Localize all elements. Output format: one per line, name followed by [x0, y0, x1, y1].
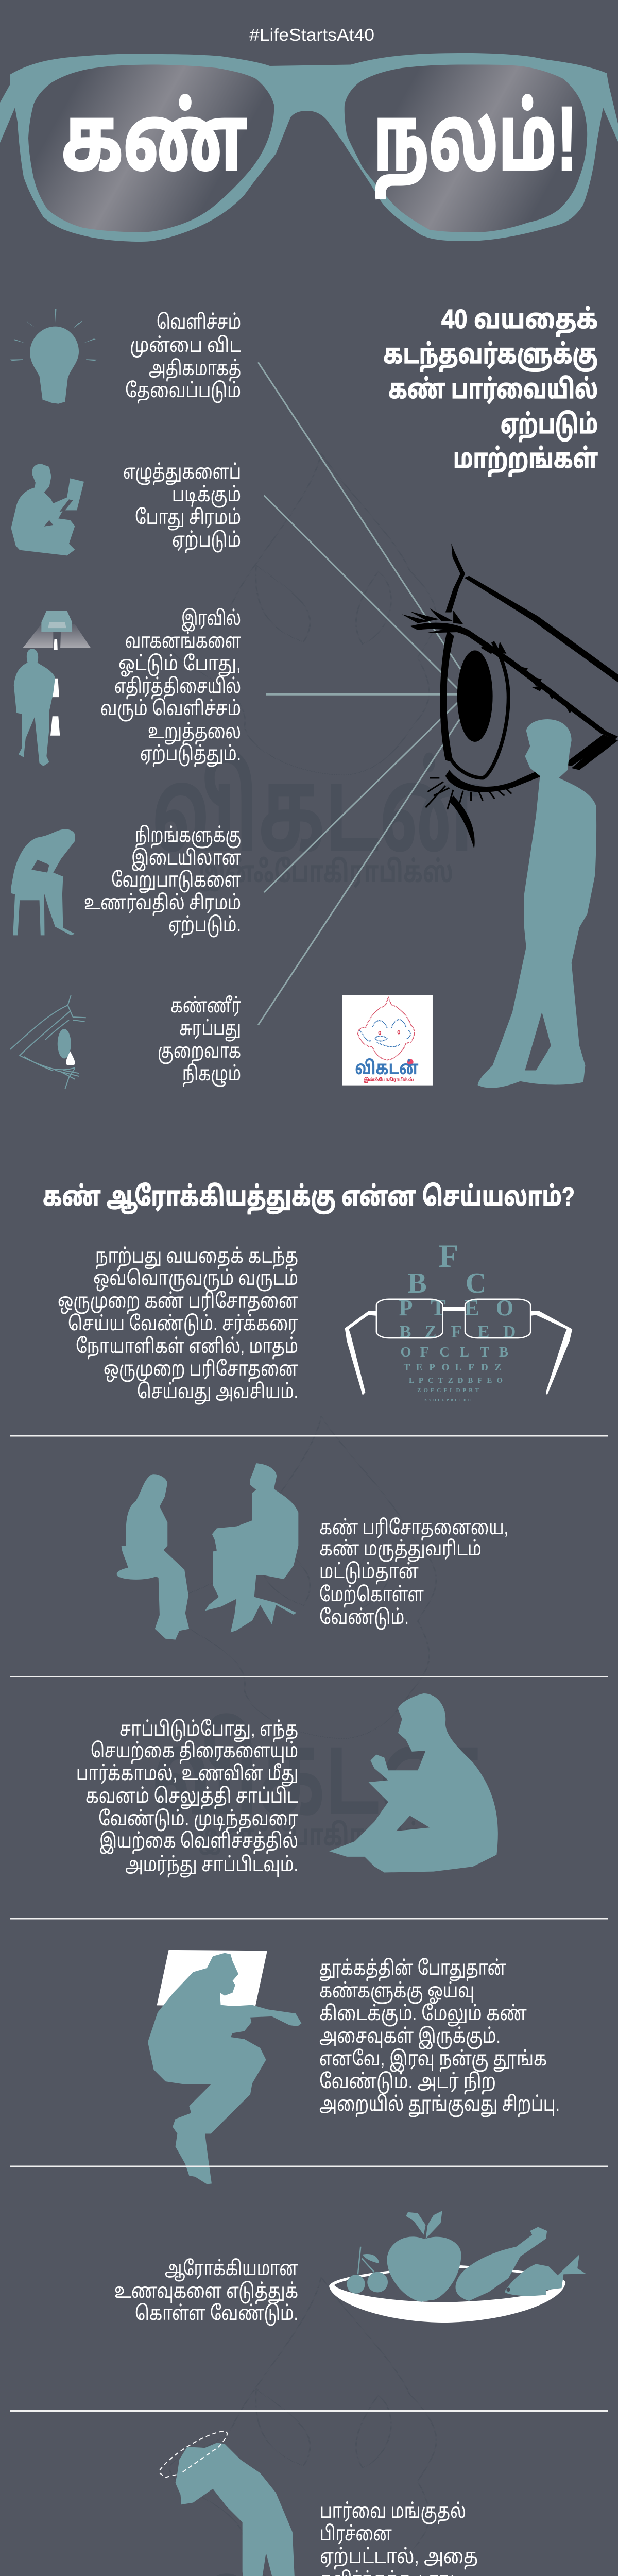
hashtag: #LifeStartsAt40	[249, 25, 374, 44]
eye chart: L	[455, 1362, 461, 1373]
text: light need: வெளிச்சம்	[157, 311, 241, 333]
text: colour difficulty: நிறங்களுக்கு	[135, 824, 241, 849]
watermark 3	[152, 2277, 479, 2576]
glasses frame	[0, 53, 618, 242]
text: eat without screens: சாப்பிடும்போது, எந்த	[119, 1718, 298, 1742]
text: eat without screens: இயற்கை வெளிச்சத்தில்	[99, 1830, 298, 1854]
logo wordmark: விகடன்	[355, 1057, 419, 1078]
eye chart: ZOECFLDPBT	[417, 1387, 479, 1394]
icon: eye with tear	[10, 995, 86, 1089]
text: colour difficulty: இடையிலான	[131, 847, 241, 871]
text: reading difficulty: எழுத்துகளைப்	[123, 461, 241, 485]
right lens	[345, 64, 587, 232]
text: healthy food: கொள்ள வேண்டும்.	[135, 2302, 298, 2326]
icon: sleeping person	[148, 1953, 301, 2184]
text: eat without screens: செயற்கை திரைகளையும்	[91, 1740, 298, 1764]
eye chart: L	[460, 1344, 469, 1360]
text: night glare	[100, 607, 241, 767]
text: blurred vision: ஏற்பட்டால், அதை	[320, 2546, 478, 2570]
text: yearly check up: ஒவ்வொருவரும் வருடம்	[93, 1267, 298, 1292]
text: yearly check up: செய்ய வேண்டும். சர்க்கரை	[68, 1313, 298, 1336]
eye chart: O	[496, 1295, 513, 1320]
text: yearly check up	[58, 1245, 298, 1404]
eye chart: F	[468, 1362, 474, 1373]
large eye illustration	[402, 544, 618, 849]
text: sleep	[319, 1957, 560, 2117]
text: reading difficulty: ஏற்படும்	[172, 529, 241, 553]
icon: pillow	[157, 1950, 267, 2006]
eye chart: O	[442, 1362, 449, 1373]
panel: healthy food	[114, 2211, 586, 2326]
logo subtitle: இன்ஃபோகிராபிக்ஸ்	[364, 1077, 414, 1083]
text: colour difficulty: வேறுபாடுகளை	[111, 869, 241, 893]
eye chart: D	[503, 1323, 516, 1342]
heading: changes after forty: 40 வயதைக்	[441, 304, 598, 337]
text: yearly check up: ஒருமுறை கண் பரிசோதனை	[58, 1290, 298, 1314]
text: eat without screens: வேண்டும். முடிந்தவரை	[98, 1808, 298, 1832]
text: sleep: வேண்டும். அடர் நிற	[319, 2071, 496, 2095]
sunglasses banner	[0, 53, 618, 242]
icon: man reading	[11, 464, 84, 555]
icon: bowl of food	[329, 2211, 586, 2323]
text: healthy food: உணவுகளை எடுத்துக்	[114, 2280, 298, 2304]
text: less tears: கண்ணீர்	[170, 995, 241, 1017]
text: eat without screens: பார்க்காமல், உணவின் மீது	[76, 1762, 298, 1786]
eye chart: F	[438, 1238, 459, 1274]
icon: man with blurred vision	[160, 2431, 301, 2576]
eye chart: O	[400, 1344, 411, 1360]
text: less tears	[158, 995, 241, 1087]
section dividers	[10, 1436, 608, 2576]
text: colour difficulty	[84, 824, 241, 938]
text: eat without screens	[76, 1718, 298, 1878]
text: colour difficulty: ஏற்படும்.	[168, 914, 241, 938]
logo: vikatan infographics: 0	[397, 1029, 400, 1036]
text: night glare: உறுத்தலை	[148, 721, 241, 745]
text: light need	[125, 311, 241, 403]
eye chart: T	[431, 1295, 446, 1320]
eye chart: Z	[495, 1362, 501, 1373]
eye chart: F	[451, 1323, 461, 1342]
text: specialist only: வேண்டும்.	[319, 1606, 409, 1630]
icon: man eating	[329, 1693, 498, 1873]
text: blurred vision: பிரச்னை	[320, 2523, 392, 2545]
text: night glare: வாகனங்களை	[125, 630, 241, 652]
eye chart: E	[416, 1362, 422, 1373]
eye chart: C	[466, 1267, 486, 1299]
icon: person sitting	[11, 829, 75, 935]
text: healthy food: ஆரோக்கியமான	[165, 2258, 298, 2282]
icon: bulb	[10, 309, 98, 404]
logo: vikatan infographics	[342, 995, 433, 1086]
text: yearly check up: நாற்பது வயதைக் கடந்த	[95, 1245, 298, 1269]
eye chart: C	[439, 1344, 450, 1360]
text: light need: தேவைப்படும்	[125, 380, 241, 403]
person looking at the eye	[478, 719, 596, 1088]
heading: changes after forty	[383, 304, 598, 477]
icon: spectacles	[345, 1299, 572, 1395]
eye chart: P	[399, 1295, 413, 1320]
text: blurred vision	[320, 2500, 478, 2576]
text: yearly check up: நோயாளிகள் எனில், மாதம்	[76, 1335, 298, 1360]
eye chart: F	[420, 1344, 428, 1360]
text: reading difficulty: போது சிரமம்	[135, 506, 241, 530]
text: specialist only: மட்டும்தான்	[319, 1561, 419, 1584]
text: yearly check up: ஒருமுறை பரிசோதனை	[104, 1358, 298, 1382]
text: eat without screens: கவனம் செலுத்தி சாப்பிட	[85, 1785, 298, 1809]
logo face	[358, 997, 414, 1060]
panel: changes after 40	[10, 309, 241, 1089]
left lens	[28, 65, 274, 232]
eye chart: E	[478, 1323, 489, 1342]
text: yearly check up: செய்வது அவசியம்.	[137, 1381, 298, 1404]
watermark 1	[152, 453, 479, 892]
eye chart: ZYOLEPBCFDC	[424, 1398, 471, 1402]
eye chart	[399, 1238, 516, 1402]
eye chart: B	[499, 1344, 508, 1360]
text: sleep: அறையில் தூங்குவது சிறப்பு.	[319, 2093, 560, 2117]
eye chart: E	[464, 1295, 479, 1320]
text: specialist only	[319, 1517, 508, 1630]
watermark 2: இன்ஃபோகிராபிக்ஸ்	[199, 1819, 453, 1855]
eye chart: D	[481, 1362, 488, 1373]
text: less tears: நிகழும்	[182, 1063, 241, 1087]
text: specialist only: கண் பரிசோதனையை,	[319, 1517, 508, 1540]
icon: night driving	[14, 611, 91, 766]
eye chart: T	[404, 1362, 410, 1373]
text: sleep: எனவே, இரவு நன்கு தூங்க	[319, 2048, 547, 2072]
text: less tears: குறைவாக	[158, 1040, 241, 1064]
panel: eat without screens	[76, 1693, 498, 1878]
eye chart: P	[429, 1362, 435, 1373]
text: sleep: தூக்கத்தின் போதுதான்	[319, 1957, 506, 1981]
text: night glare: ஓட்டும் போது,	[118, 653, 241, 677]
text: less tears: சுரப்பது	[179, 1018, 241, 1041]
text: sleep: கிடைக்கும். மேலும் கண்	[319, 2003, 527, 2026]
panel: yearly check up	[58, 1238, 572, 1404]
text: light need: அதிகமாகத்	[149, 358, 241, 381]
text: specialist only: கண் மருத்துவரிடம்	[319, 1538, 482, 1562]
text: eat without screens: அமர்ந்து சாப்பிடவும்.	[125, 1854, 298, 1878]
text: night glare: எதிர்த்திசையில்	[114, 675, 241, 699]
text: reading difficulty	[123, 461, 241, 553]
panel: consult eye doctor	[117, 1463, 508, 1640]
text: blurred vision: பார்வை மங்குதல்	[320, 2500, 466, 2524]
connector lines from symptoms to the eye	[258, 362, 469, 1025]
text: night glare: வரும் வெளிச்சம்	[100, 698, 241, 722]
logo: vikatan infographics: 0	[378, 1030, 381, 1036]
eye chart: B	[400, 1323, 411, 1342]
text: specialist only: மேற்கொள்ள	[319, 1584, 424, 1608]
text: reading difficulty: படிக்கும்	[172, 484, 241, 507]
text: sleep: அசைவுகள் இருக்கும்.	[319, 2025, 501, 2049]
text: sleep: கண்களுக்கு ஓய்வு	[319, 1980, 474, 2004]
watermark 1: இன்ஃபோகிராபிக்ஸ்	[199, 855, 453, 892]
eye chart: LPCTZDBFEO	[409, 1377, 503, 1385]
text: light need: முன்பை விட	[130, 334, 241, 358]
panel: blurred vision	[160, 2431, 478, 2576]
icon: patient and doctor	[117, 1463, 298, 1640]
text: night glare: ஏற்படுத்தும்.	[140, 743, 241, 767]
watermark 2	[152, 1416, 479, 1855]
eye chart: B	[407, 1267, 427, 1299]
title: கண்: கண்	[61, 89, 247, 189]
panel: sleep	[148, 1950, 560, 2184]
text: healthy food	[114, 2258, 298, 2326]
eye chart: T	[480, 1344, 489, 1360]
text: night glare: இரவில்	[181, 607, 241, 632]
text: colour difficulty: உணர்வதில் சிரமம்	[84, 892, 241, 916]
eye chart: Z	[425, 1323, 436, 1342]
